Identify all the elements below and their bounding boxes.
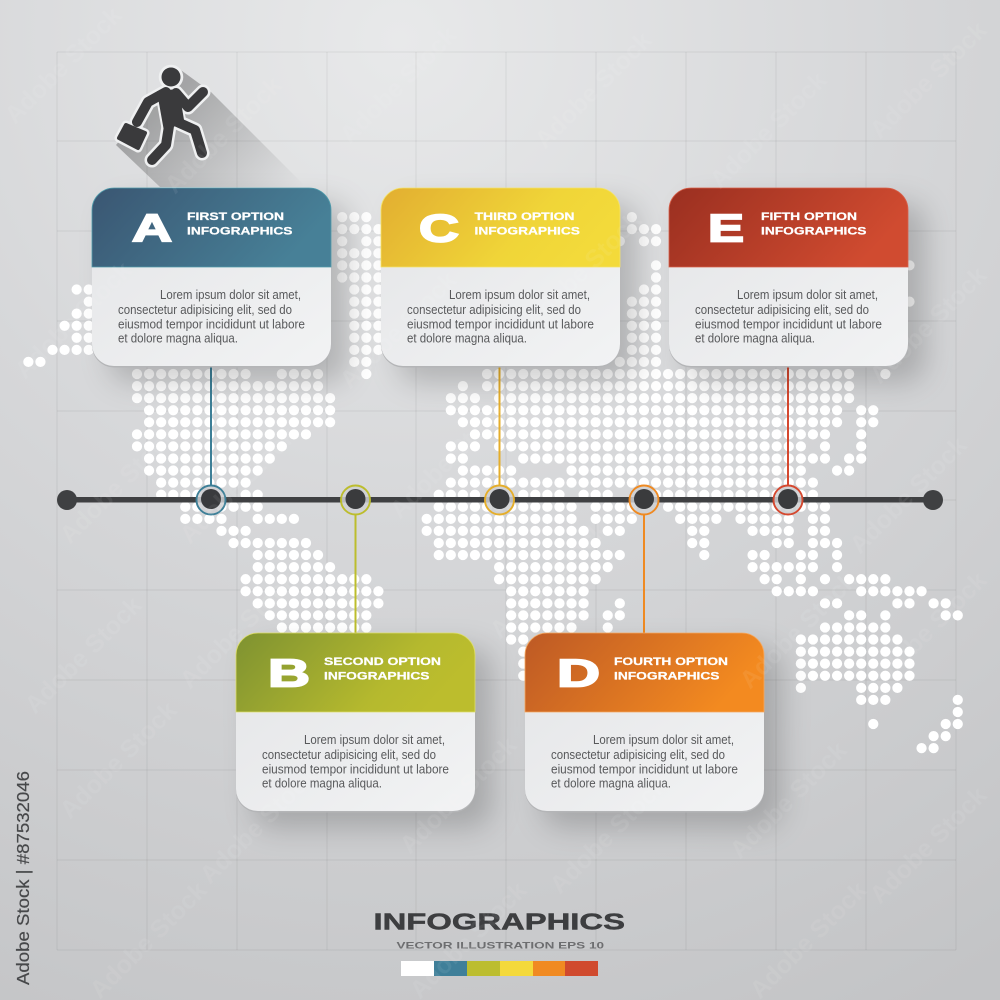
timeline bar (67, 497, 933, 502)
icon shadow (116, 68, 306, 187)
timeline (57, 486, 943, 514)
icon figure (119, 68, 203, 160)
watermark: Adobe Stock (529, 26, 657, 154)
text E (695, 287, 882, 346)
text A: eiusmod tempor incididunt ut labore (118, 316, 305, 332)
heading D: FOURTH OPTION (614, 656, 728, 668)
text A (118, 287, 305, 346)
panel: option A (92, 188, 331, 368)
watermark: Adobe Stock (9, 256, 137, 384)
letter A: A (132, 208, 172, 250)
heading A: INFOGRAPHICS (187, 225, 292, 237)
text C: Lorem ipsum dolor sit amet, (449, 287, 590, 302)
watermark: Adobe Stock (734, 566, 862, 694)
watermark: Adobe Stock (174, 421, 302, 549)
watermark: Adobe Stock (159, 71, 287, 199)
watermark: Adobe Stock (174, 566, 302, 694)
heading E (761, 211, 866, 237)
text C: et dolore magna aliqua. (407, 330, 527, 346)
heading D: INFOGRAPHICS (614, 670, 720, 682)
heading B: INFOGRAPHICS (324, 670, 430, 682)
watermark: Adobe Stock (0, 1, 127, 129)
heading A (187, 211, 292, 237)
text C: consectetur adipisicing elit, sed do (407, 302, 581, 317)
watermark: Adobe Stock (864, 566, 992, 694)
watermark: Adobe Stock (544, 771, 672, 899)
stock id side label: Adobe Stock | #87532046 (13, 771, 33, 985)
icon outline (119, 67, 203, 160)
text D: et dolore magna aliqua. (551, 776, 671, 790)
node A (196, 486, 226, 514)
watermark: Adobe Stock (54, 696, 182, 824)
text D (551, 732, 738, 790)
text E: eiusmod tempor incididunt ut labore (695, 316, 882, 332)
watermark: Adobe Stock (384, 396, 512, 524)
text E: consectetur adipisicing elit, sed do (695, 302, 869, 317)
heading C: THIRD OPTION (474, 211, 574, 223)
text E: Lorem ipsum dolor sit amet, (737, 287, 878, 302)
letter C: C (419, 208, 459, 250)
heading C (474, 211, 580, 237)
watermark: Adobe Stock (519, 206, 647, 334)
header E (669, 188, 908, 267)
text B: Lorem ipsum dolor sit amet, (304, 732, 445, 747)
heading E: INFOGRAPHICS (761, 225, 866, 237)
watermark: Adobe Stock (724, 736, 852, 864)
heading B: SECOND OPTION (324, 656, 441, 668)
icon: running businessman with long shadow (116, 67, 306, 187)
watermark: Adobe Stock (54, 421, 182, 549)
text B: eiusmod tempor incididunt ut labore (262, 762, 449, 776)
node E (774, 486, 802, 514)
letter B: B (268, 652, 310, 696)
connector lines (211, 366, 788, 634)
panel: option B (236, 633, 475, 812)
header B (236, 633, 475, 712)
node D (630, 486, 658, 514)
panel: option E (669, 188, 908, 368)
watermark: Adobe Stock (484, 516, 612, 644)
watermark: Adobe Stock (864, 261, 992, 389)
watermark: Adobe Stock (844, 431, 972, 559)
panel: option D (525, 633, 764, 812)
text A: consectetur adipisicing elit, sed do (118, 302, 292, 317)
text C (407, 287, 594, 346)
watermark: Adobe Stock (334, 21, 462, 149)
dotted world map (28, 217, 958, 748)
heading D (614, 656, 728, 682)
subtitle: VECTOR ILLUSTRATION EPS 10 (396, 940, 604, 951)
panel: option C (381, 188, 620, 368)
heading E: FIFTH OPTION (761, 211, 857, 223)
text A: et dolore magna aliqua. (118, 330, 238, 346)
letter E: E (708, 208, 744, 250)
header C (381, 188, 620, 267)
text B: consectetur adipisicing elit, sed do (262, 747, 436, 762)
title: INFOGRAPHICS (374, 908, 625, 934)
heading B (324, 656, 441, 682)
header A (92, 188, 331, 267)
watermark: Adobe Stock (194, 761, 322, 889)
text B: et dolore magna aliqua. (262, 776, 382, 790)
text D: consectetur adipisicing elit, sed do (551, 747, 725, 762)
colour legend bar (401, 961, 598, 976)
text B (262, 732, 449, 790)
letter D: D (557, 652, 600, 696)
watermark: Adobe Stock (334, 266, 462, 394)
text D: Lorem ipsum dolor sit amet, (593, 732, 734, 747)
watermark: Adobe Stock (704, 66, 832, 194)
node C (485, 486, 514, 514)
text E: et dolore magna aliqua. (695, 330, 815, 346)
timeline end points (57, 490, 943, 510)
watermark: Adobe Stock (864, 781, 992, 909)
text A: Lorem ipsum dolor sit amet, (160, 287, 301, 302)
watermark: Adobe Stock (19, 591, 147, 719)
header D (525, 633, 764, 712)
heading C: INFOGRAPHICS (474, 225, 580, 237)
watermark: Adobe Stock (864, 16, 992, 144)
heading A: FIRST OPTION (187, 211, 284, 223)
node B (341, 486, 370, 514)
text D: eiusmod tempor incididunt ut labore (551, 762, 738, 776)
text C: eiusmod tempor incididunt ut labore (407, 316, 594, 332)
watermark: Adobe Stock (394, 731, 522, 859)
